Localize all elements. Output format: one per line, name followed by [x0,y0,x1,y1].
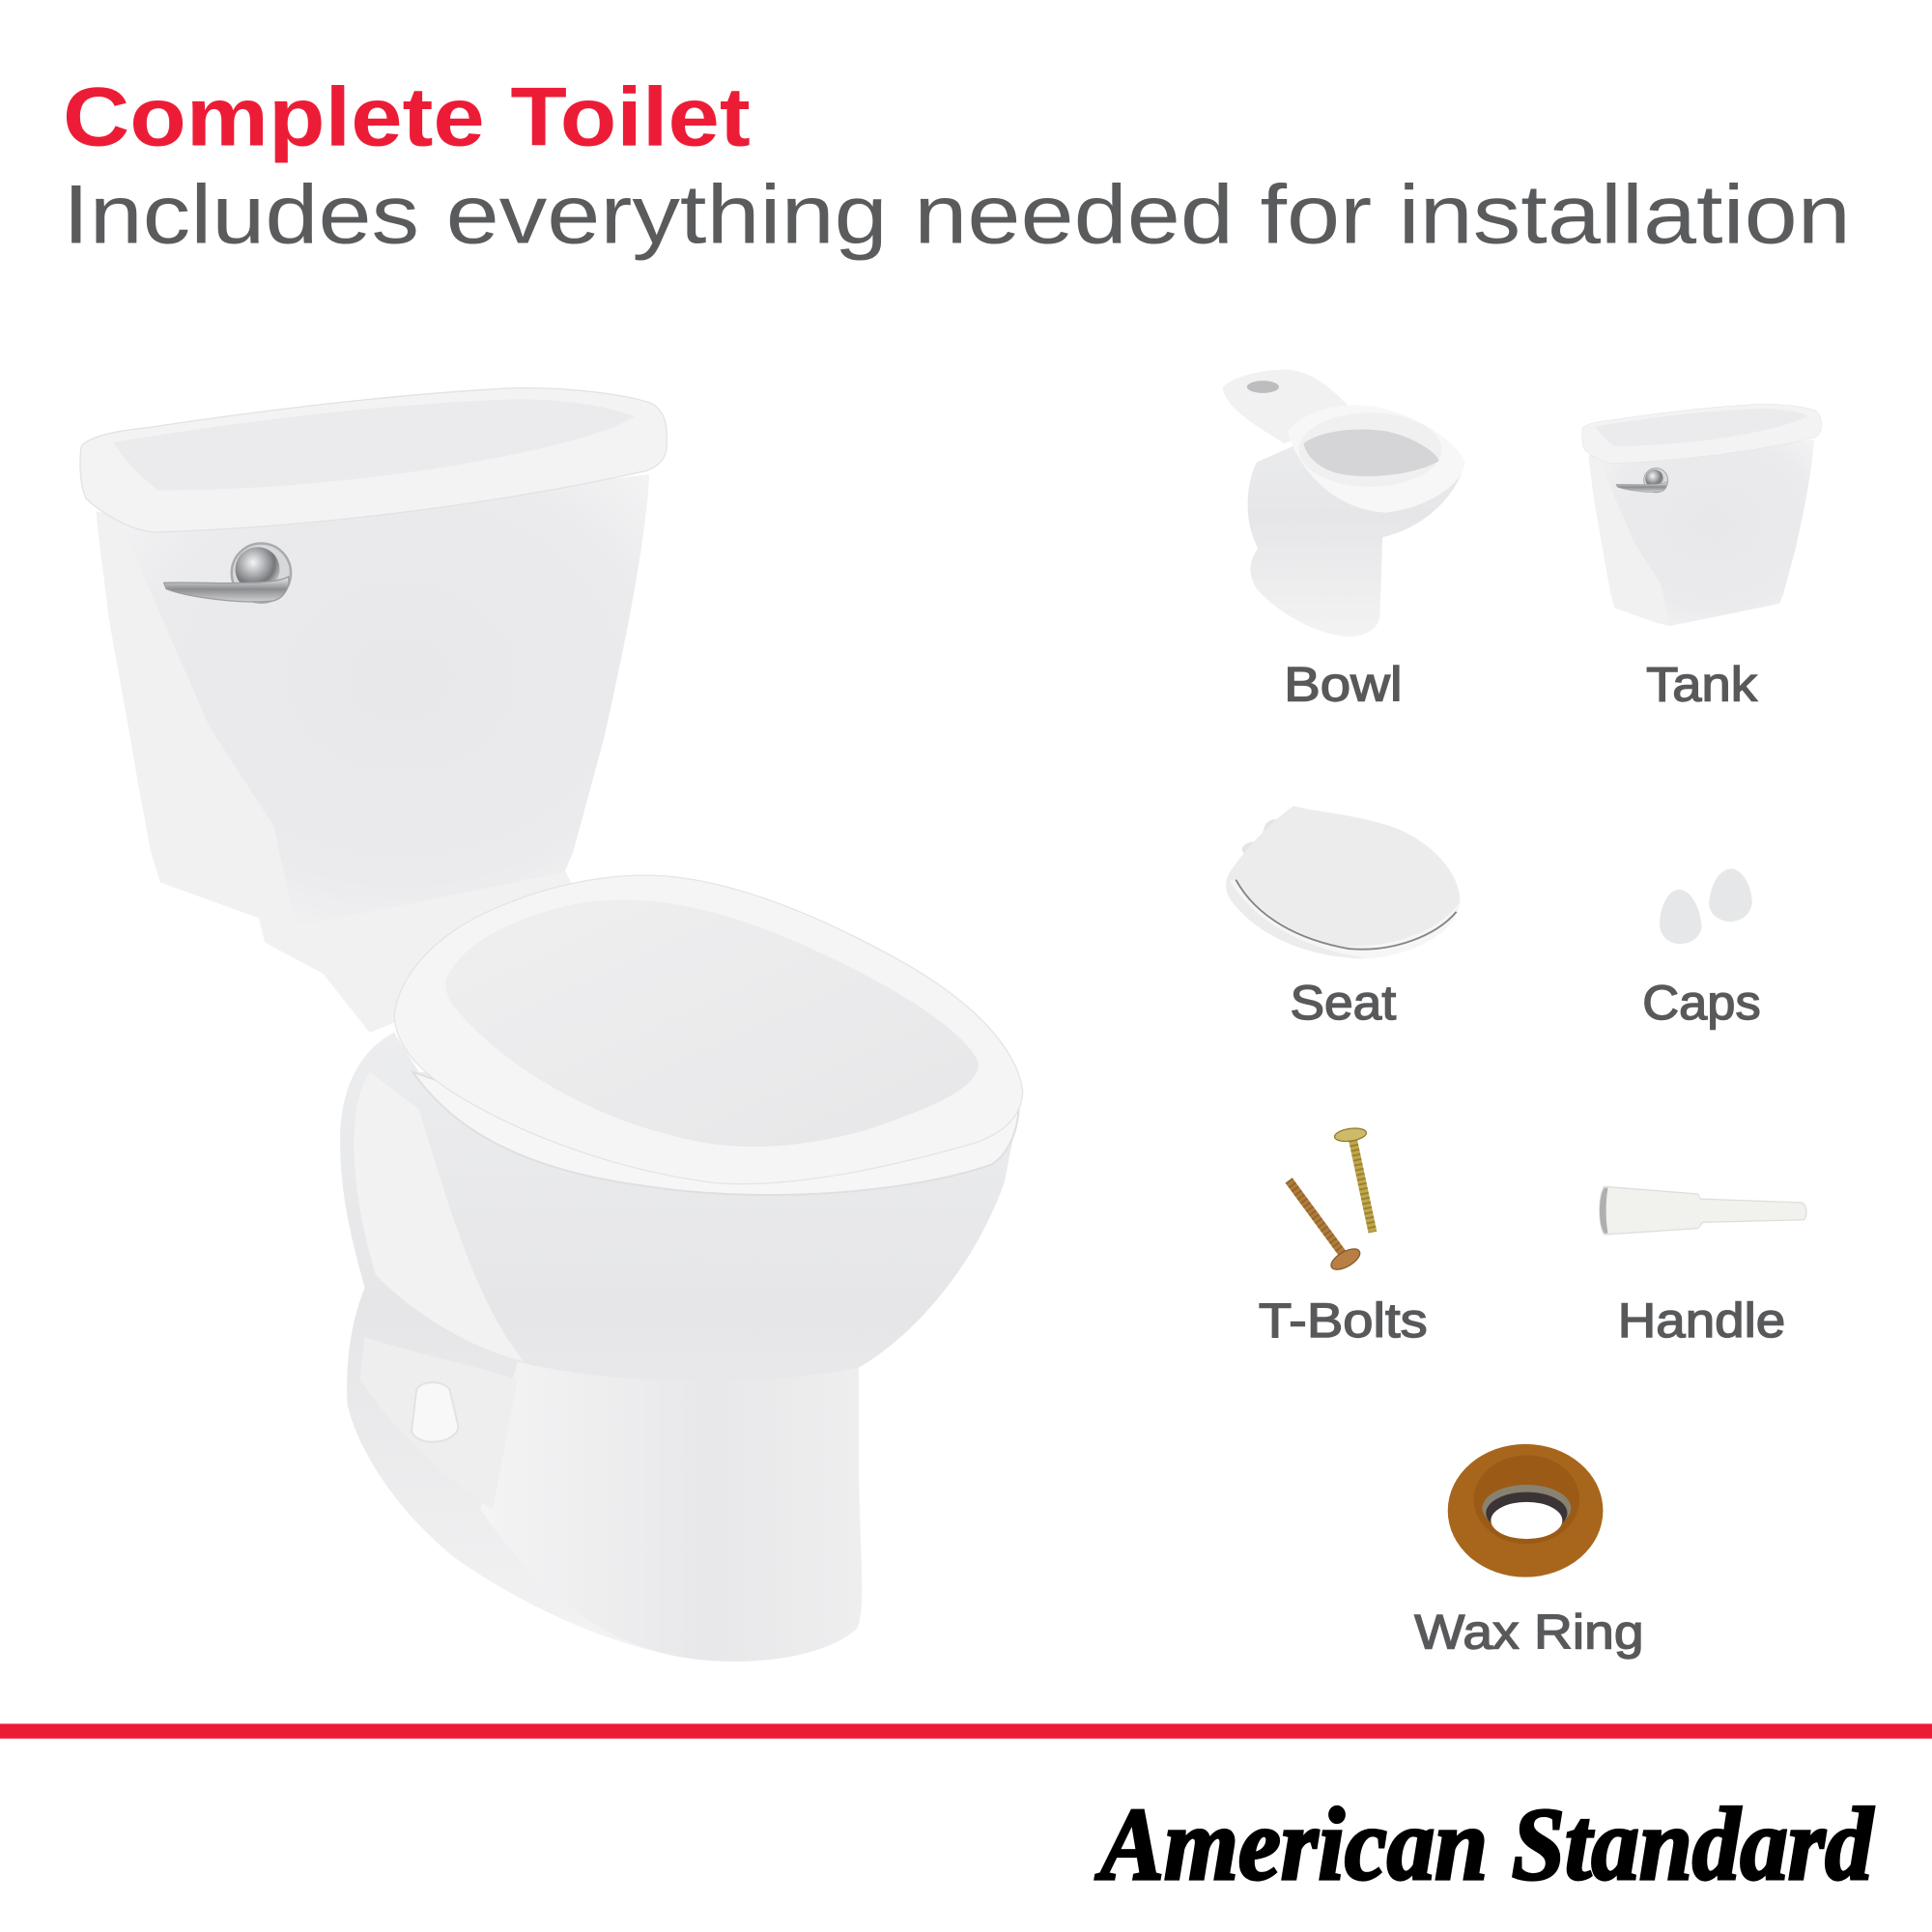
bowl interior [1303,429,1439,476]
label: bowl: Bowl [1284,658,1403,712]
toilet foot recess [359,1337,518,1509]
logo: American Standard: American Standard [1094,1788,1874,1902]
part: bowl [1222,370,1465,637]
bolt copper [1289,1180,1363,1273]
part: tank [1582,404,1821,626]
seat hinge line [1236,880,1457,950]
seat body [1226,806,1460,958]
part: caps [1660,868,1752,944]
toilet lid inner panel [445,899,979,1147]
seat lower edge [1230,880,1460,958]
part: wax ring [1448,1444,1603,1577]
part: seat [1226,806,1460,958]
cap left [1660,890,1701,944]
label: seat: Seat [1290,976,1396,1030]
label: handle: Handle [1618,1293,1785,1348]
part: handle [1600,1186,1806,1235]
ring body [1448,1444,1603,1577]
title: Complete Toilet [63,71,751,164]
toilet connector deck [259,868,579,1033]
illustration: complete toilet [80,388,1023,1662]
bolt brass [1334,1126,1373,1233]
label: caps: Caps [1642,976,1761,1030]
toilet floor bolt cap [412,1382,458,1442]
label: wax ring: Wax Ring [1414,1605,1644,1660]
part: t-bolts [1289,1126,1373,1273]
toilet tank [80,388,667,926]
label: t-bolts: T-Bolts [1259,1293,1428,1348]
label: tank: Tank [1646,658,1757,712]
cap right [1709,868,1752,922]
bowl opening [1298,412,1441,487]
ring hole [1491,1502,1562,1539]
ring inner flange [1482,1485,1571,1531]
bowl body [1248,419,1462,637]
bowl inlet [1247,381,1279,393]
toilet seat lid [394,875,1023,1184]
ring funnel [1474,1455,1579,1544]
bowl tank deck [1222,370,1350,443]
toilet pedestal [480,1361,862,1662]
bowl rim [1288,405,1465,513]
subtitle: Includes everything needed for installation [63,167,1851,261]
seat hinge bumps [1242,819,1284,865]
toilet base and bowl [340,1033,1019,1662]
red divider bar [0,1723,1932,1739]
toilet rim [412,1072,1019,1195]
part labels [1259,658,1785,1660]
toilet trapway [354,1072,524,1361]
